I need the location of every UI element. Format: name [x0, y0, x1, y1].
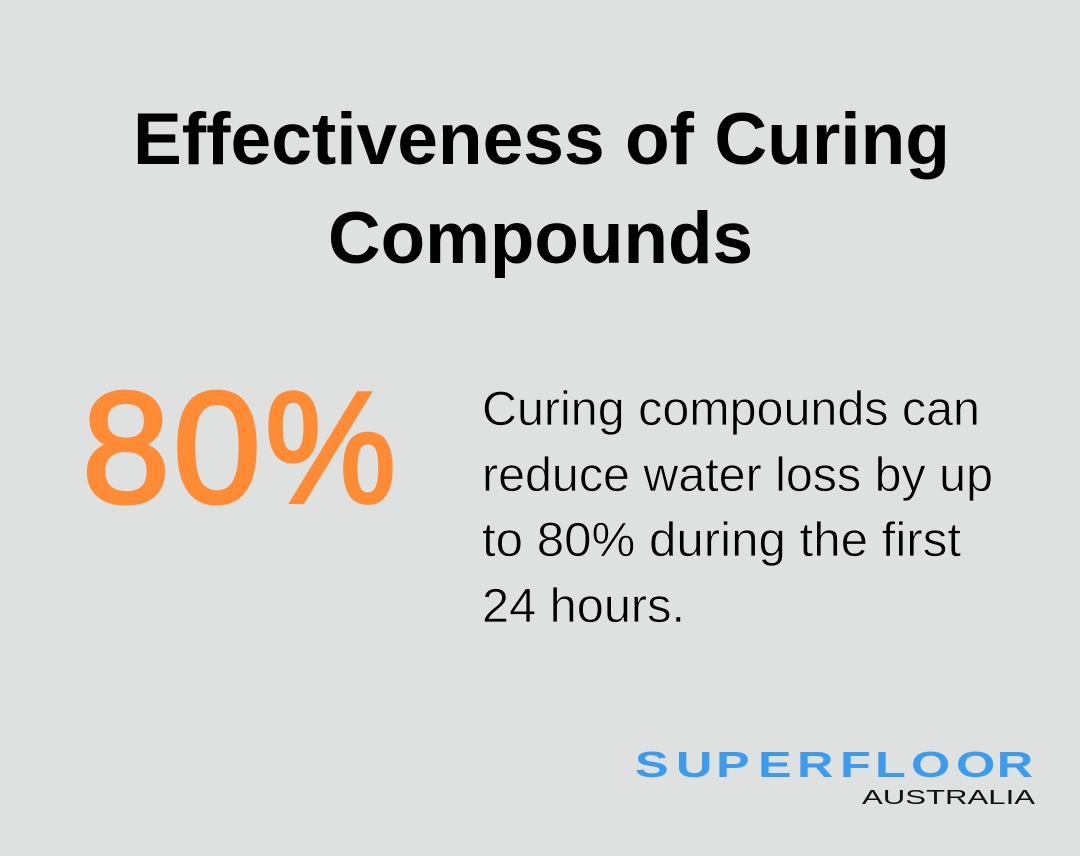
description text: to 80% during the first — [482, 514, 961, 567]
big stat: 80%: % — [265, 360, 396, 536]
description text: 24 hours. — [482, 580, 685, 633]
title: Effectiveness of Curing — [133, 99, 950, 180]
logo subtitle: AUSTRALIA — [862, 787, 1036, 809]
logo wordmark: SUPERFLOOR — [635, 745, 1033, 785]
description text: reduce water loss by up — [482, 449, 993, 502]
title: Compounds — [328, 198, 753, 279]
logo: Superfloor Australia — [635, 745, 1036, 809]
big stat: 80%: 80 — [82, 360, 261, 536]
big stat: 80% — [82, 360, 396, 536]
description text — [482, 383, 993, 633]
description text: Curing compounds can — [482, 383, 980, 436]
title — [133, 99, 950, 279]
